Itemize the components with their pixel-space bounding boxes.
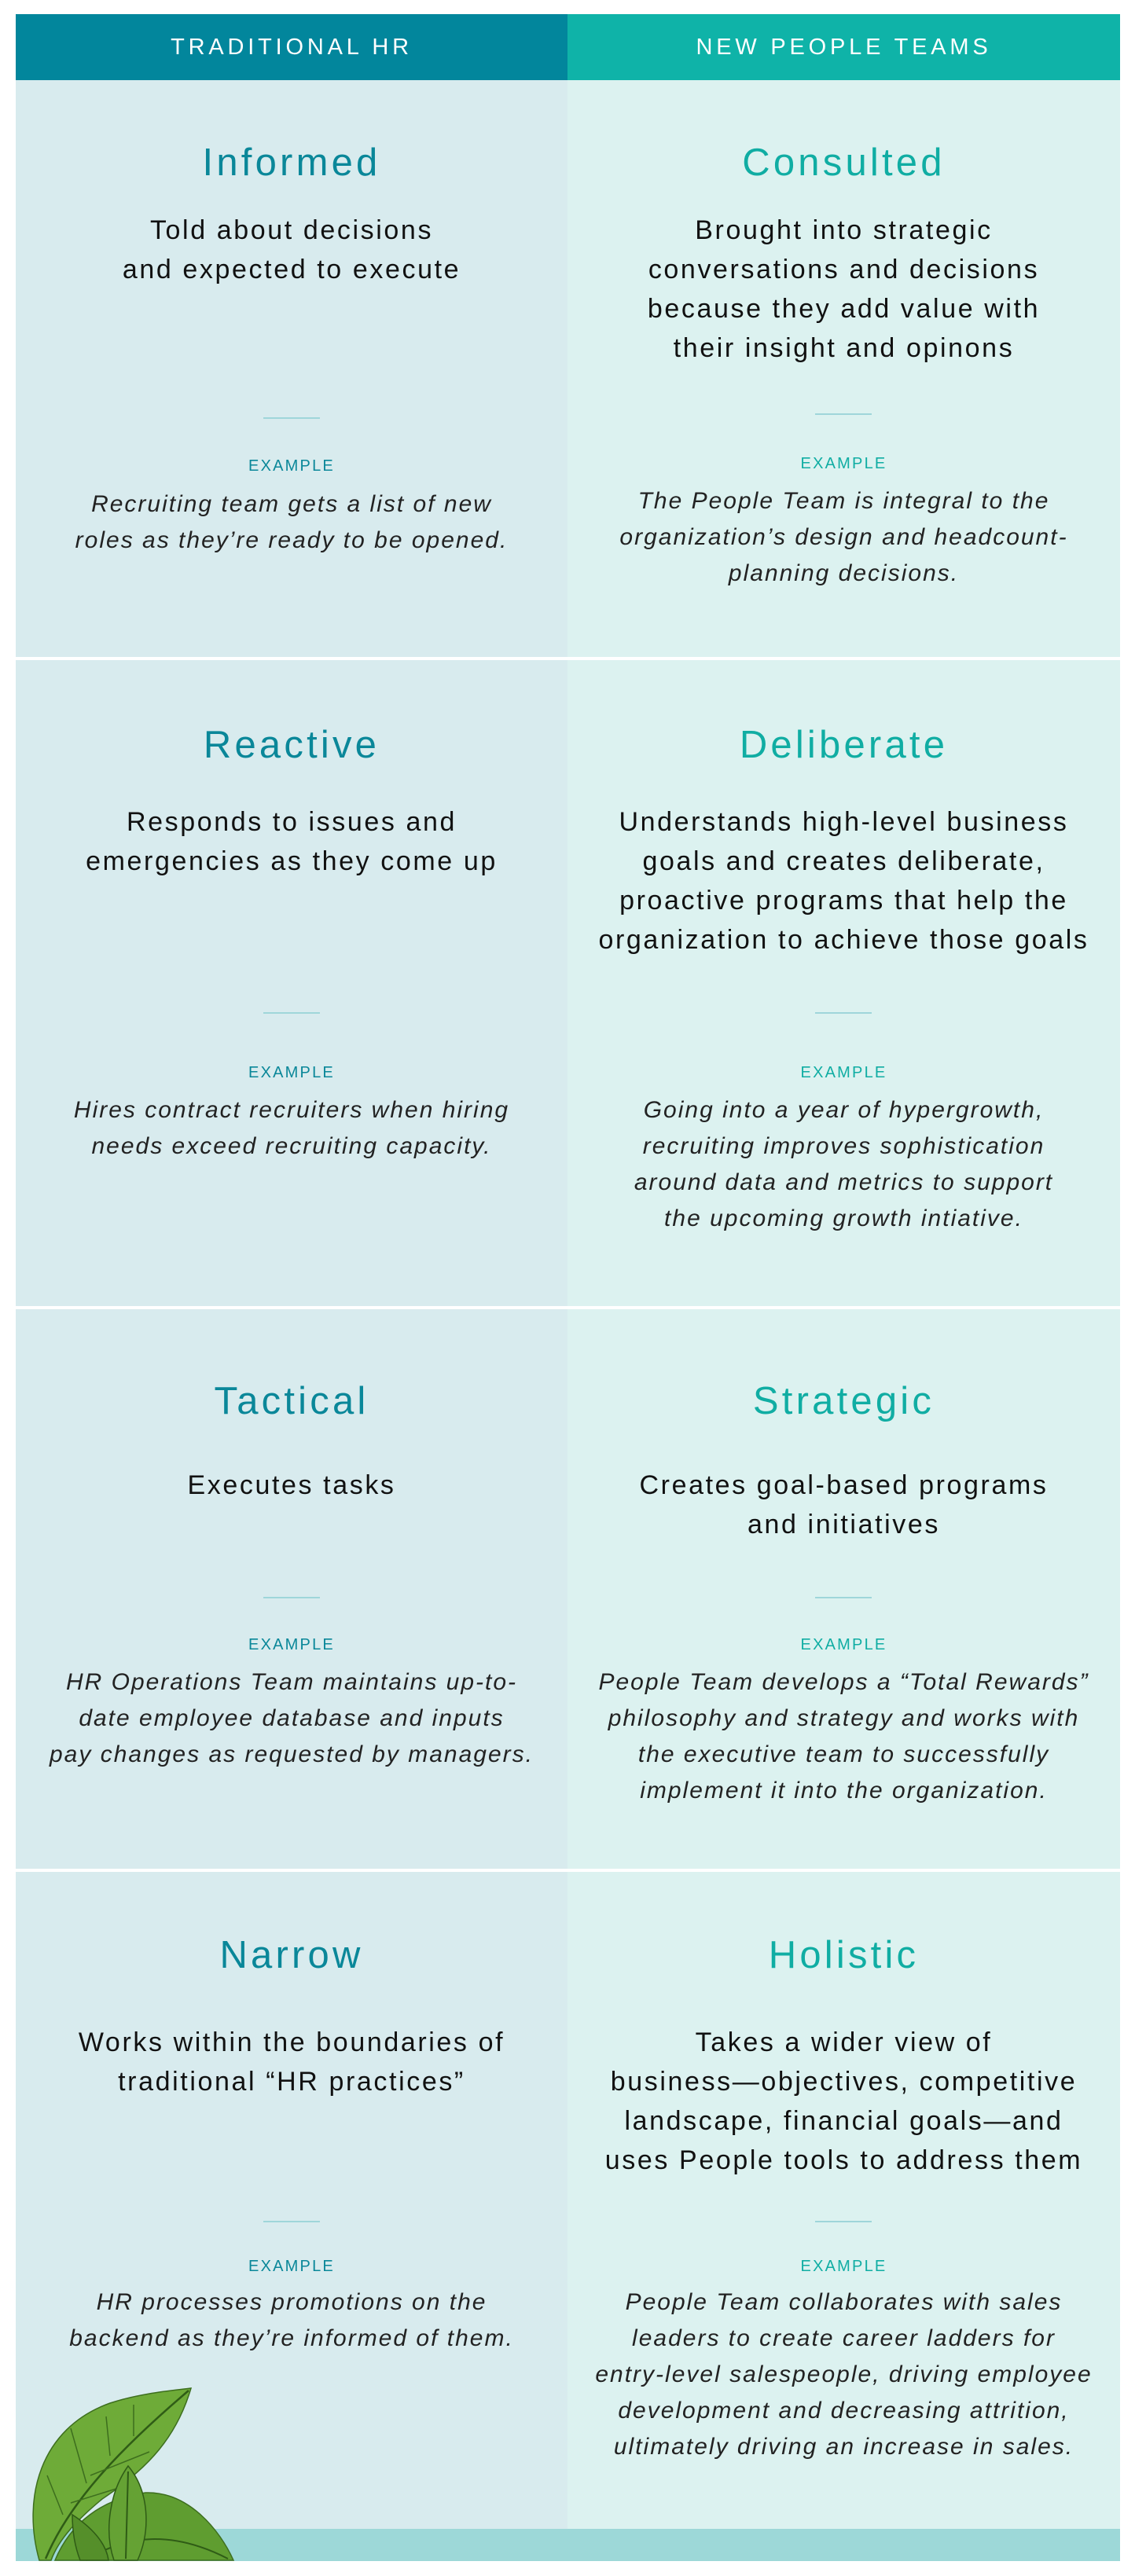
icon: leaves illustration — [32, 2387, 234, 2561]
text: the upcoming growth intiative. — [664, 1205, 1023, 1231]
row 2 left: Reactive — [74, 724, 509, 1159]
row 1 left: Informed: Recruiting team gets a list of new — [91, 491, 492, 517]
row 4 right: Holistic: ultimately driving an increase in sales. — [614, 2434, 1074, 2460]
row 3 right: Strategic: EXAMPLE — [801, 1636, 887, 1653]
row 1 right: Consulted: conversations and decisions — [648, 255, 1039, 284]
row 4 right: Holistic: Holistic — [769, 1934, 919, 1976]
row 4 left: Narrow: Narrow — [219, 1934, 364, 1976]
row 4 left: Narrow: Works within the boundaries of — [79, 2027, 505, 2057]
row 1 left: Informed: roles as they’re ready to be opened. — [75, 527, 508, 553]
header: new people teams: NEW PEOPLE TEAMS — [696, 35, 992, 60]
row 2 right: Deliberate: proactive programs that help the — [619, 886, 1068, 916]
row 4 right: Holistic: Takes a wider view of — [696, 2027, 992, 2057]
row 1 right: Consulted: EXAMPLE — [801, 455, 887, 472]
row 2 right: Deliberate: EXAMPLE — [801, 1064, 887, 1081]
row 4 right: Holistic: People Team collaborates with sales — [626, 2289, 1062, 2315]
row 2 right: Deliberate: recruiting improves sophistication — [643, 1133, 1045, 1159]
row 1 right: Consulted: The People Team is integral to the — [638, 488, 1049, 514]
column background right — [568, 80, 1120, 2529]
row 1 right: Consulted: organization’s design and headcount- — [619, 524, 1068, 550]
row 2 right: Deliberate: Understands high-level business — [619, 807, 1069, 837]
row 1 right: Consulted — [619, 141, 1068, 586]
row 3 left: Tactical: EXAMPLE — [248, 1636, 335, 1653]
row 2 left: Reactive: EXAMPLE — [248, 1064, 335, 1081]
row 2 right: Deliberate: goals and creates deliberate, — [642, 846, 1045, 876]
row 2 left: Reactive: Reactive — [204, 724, 380, 766]
row 2 left: Reactive: emergencies as they come up — [86, 846, 498, 876]
row 2 right: Deliberate — [598, 724, 1089, 1231]
row 1 right: Consulted: Brought into strategic — [695, 215, 993, 245]
row 3 right: Strategic: implement it into the organization. — [640, 1778, 1048, 1804]
row 4 right: Holistic — [595, 1934, 1093, 2460]
row 4 left: Narrow: traditional “HR practices” — [118, 2067, 465, 2097]
row 1 left: Informed: Told about decisions — [150, 215, 433, 245]
header: traditional HR: TRADITIONAL HR — [171, 35, 413, 60]
row 3 right: Strategic — [598, 1380, 1089, 1804]
column background left — [16, 80, 568, 2529]
row 3 right: Strategic: philosophy and strategy and works with — [608, 1705, 1079, 1731]
row 1 right: Consulted: planning decisions. — [729, 560, 959, 586]
row 3 right: Strategic: Creates goal-based programs — [640, 1470, 1049, 1500]
row 3 left: Tactical: pay changes as requested by managers. — [50, 1741, 534, 1767]
row 2 left: Reactive: Responds to issues and — [127, 807, 457, 837]
header: traditional HR — [16, 14, 568, 80]
row 2 right: Deliberate: Going into a year of hypergrowth, — [644, 1097, 1044, 1123]
row 2 right: Deliberate: organization to achieve those goals — [598, 925, 1089, 955]
row 4 left: Narrow: HR processes promotions on the — [97, 2289, 487, 2315]
row 4 left: Narrow — [69, 1934, 514, 2351]
row 1 right: Consulted: because they add value with — [648, 294, 1040, 324]
row 1 right: Consulted: their insight and opinons — [674, 333, 1014, 363]
row 4 right: Holistic: entry-level salespeople, driving employee — [595, 2361, 1093, 2387]
row 1 left: Informed: EXAMPLE — [248, 457, 335, 475]
row 3 right: Strategic: Strategic — [753, 1380, 935, 1422]
row 3 left: Tactical: date employee database and inputs — [79, 1705, 505, 1731]
row 1 left: Informed: and expected to execute — [123, 255, 461, 284]
row 3 left: Tactical — [49, 1380, 534, 1767]
row 4 right: Holistic: business—objectives, competitive — [611, 2067, 1077, 2097]
row 3 right: Strategic: and initiatives — [747, 1510, 940, 1539]
row 2 right: Deliberate: around data and metrics to support — [634, 1169, 1053, 1195]
row 4 right: Holistic: landscape, financial goals—and — [624, 2106, 1063, 2136]
row 3 left: Tactical: Executes tasks — [187, 1470, 396, 1500]
row 4 left: Narrow: backend as they’re informed of them. — [69, 2325, 514, 2351]
row 4 right: Holistic: development and decreasing attrition, — [618, 2398, 1070, 2424]
row 1 left: Informed: Informed — [203, 141, 380, 184]
row 1 left: Informed — [75, 141, 508, 553]
row 1 right: Consulted: Consulted — [742, 141, 946, 184]
row 4 right: Holistic: uses People tools to address them — [605, 2145, 1082, 2175]
row 2 left: Reactive: needs exceed recruiting capacity. — [91, 1133, 492, 1159]
bottom band — [16, 2529, 1120, 2561]
header: new people teams — [568, 14, 1120, 80]
row 3 right: Strategic: the executive team to successfully — [638, 1741, 1049, 1767]
row 4 right: Holistic: EXAMPLE — [801, 2258, 887, 2275]
row 2 left: Reactive: Hires contract recruiters when hiring — [74, 1097, 509, 1123]
row 3 left: Tactical: Tactical — [214, 1380, 369, 1422]
row 4 right: Holistic: leaders to create career ladders for — [632, 2325, 1056, 2351]
row 4 left: Narrow: EXAMPLE — [248, 2258, 335, 2275]
row 3 left: Tactical: HR Operations Team maintains up-to- — [66, 1669, 517, 1695]
row 3 right: Strategic: People Team develops a “Total Rewards” — [598, 1669, 1089, 1695]
row 2 right: Deliberate: Deliberate — [740, 724, 948, 766]
